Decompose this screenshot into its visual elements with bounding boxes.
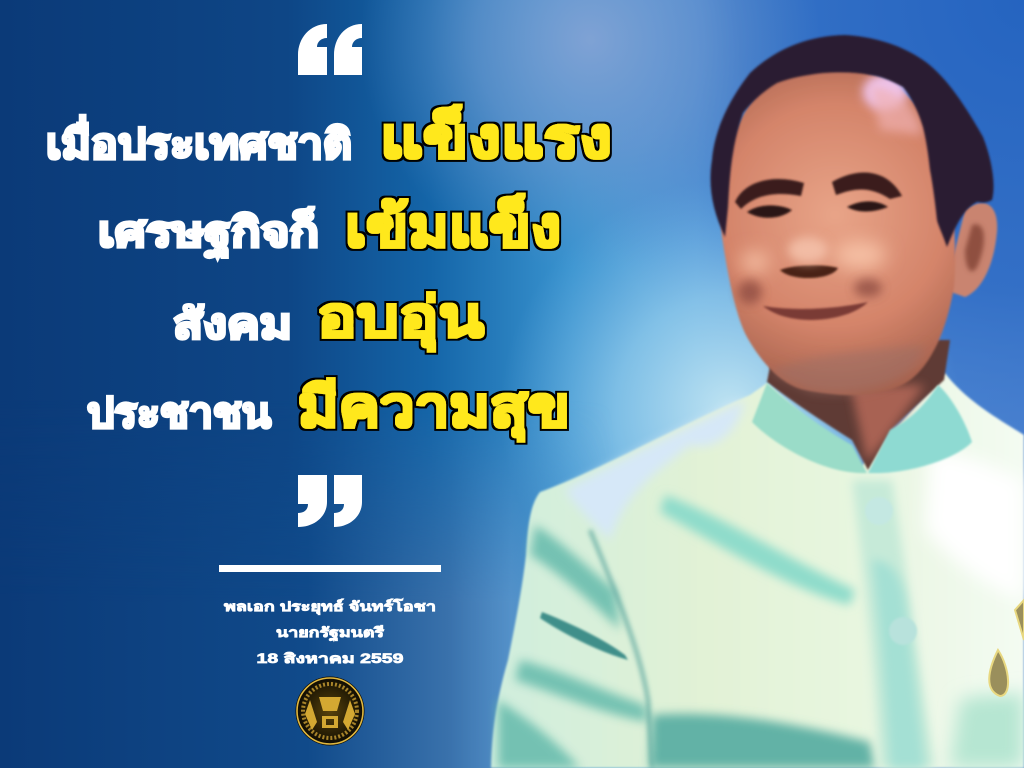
quote line 3: อบอุ่น [317,286,484,352]
icon: government seal [296,676,364,746]
quote line 1: เมื่อประเทศชาติ [46,115,352,167]
quote line 1 [46,105,612,169]
quote line 3: สังคม [173,301,292,347]
chest diagonal band [660,495,855,605]
shirt body [491,373,1024,768]
sleeve crease [540,612,628,660]
hair [711,35,994,247]
chin shadow [770,345,925,394]
opening quote mark [298,24,362,75]
mouth [763,302,868,320]
quote line 3 [173,286,484,352]
background gradient [240,0,1024,768]
eyes [747,201,888,218]
nose shadow [780,265,838,278]
lapel pin [989,600,1024,696]
ear [945,203,997,297]
attribution text: พลเอก ประยุทธ์ จันทร์โอชา [224,597,436,615]
quote line 2: เข้มแข็ง [345,194,561,258]
nose highlight [788,237,828,263]
quote line 4 [87,376,570,442]
buttons [865,497,917,645]
quote line 4: มีความสุข [298,376,570,442]
face [721,65,955,395]
right shirt highlight [925,450,1024,600]
attribution text: 18 สิงหาคม 2559 [256,651,404,666]
quote line 2: เศรษฐกิจก็ [98,207,319,259]
collar [752,383,972,473]
lower shirt shadow [650,714,875,768]
smile shadows [738,279,882,304]
closing quote mark [298,475,362,527]
cheek highlights [741,241,886,272]
quote line 2 [98,194,561,259]
forehead highlight [863,74,907,110]
neck [767,340,950,470]
portrait photo [491,35,1024,768]
attribution text [224,597,436,666]
attribution text: นายกรัฐมนตรี [276,625,385,642]
placket [852,480,935,768]
quote line 1: แข็งแรง [380,105,612,169]
quote line 4: ประชาชน [87,390,271,436]
shoulder highlight [565,400,745,540]
divider rule [219,565,441,572]
eyebrows [735,173,902,209]
sleeve shading [498,525,648,768]
sleeve seam [590,530,652,768]
